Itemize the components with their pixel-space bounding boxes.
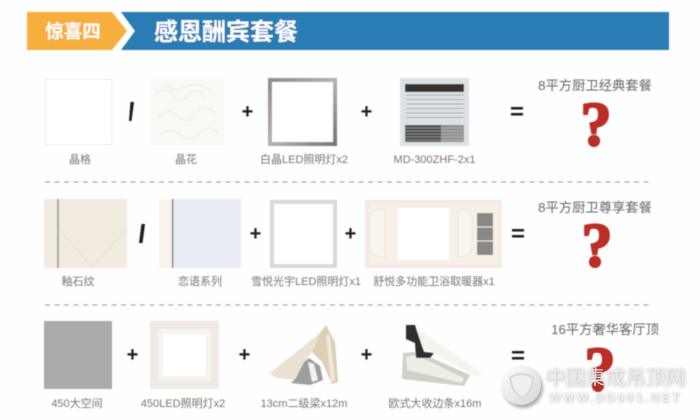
product: 晶格 white panel: 晶格 — [69, 152, 91, 166]
watermark logo — [501, 365, 543, 408]
plus operator: + — [242, 101, 253, 123]
result: living room package: 16平方奢华客厅顶 — [551, 321, 659, 337]
blue title bar — [121, 12, 669, 50]
plus operator: + — [361, 101, 372, 123]
orange tag — [27, 12, 127, 50]
product: 450 LED light — [141, 321, 225, 410]
product: 13cm beam — [261, 325, 347, 410]
slash operator — [129, 102, 134, 121]
product: 白晶 LED light: 白晶LED照明灯x2 — [260, 152, 348, 166]
watermark text: WWW.DD001.NET — [550, 391, 682, 405]
product: 白晶 LED light — [260, 78, 348, 166]
blue title bar: 感恩酬宾套餐 — [154, 18, 298, 46]
product: 450 large-space panel — [44, 321, 112, 410]
row 2: premium package — [44, 199, 652, 288]
product: 恋语系列 panel: 恋语系列 — [178, 274, 222, 288]
product: 晶花 patterned panel — [150, 79, 224, 166]
product: MD-300ZHF-2 heater — [394, 78, 475, 166]
product: 釉石纹 tile: 釉石纹 — [62, 274, 94, 288]
product: European trim strip: 欧式大收边条x16m — [389, 396, 481, 410]
product: 舒悦 bath heater: 舒悦多功能卫浴取暖器x1 — [373, 274, 495, 288]
divider — [45, 181, 653, 183]
product: 450 LED light: 450LED照明灯x2 — [141, 397, 225, 410]
product: 晶花 patterned panel: 晶花 — [175, 153, 197, 166]
result: classic package: 8平方厨卫经典套餐 — [538, 78, 652, 93]
watermark text: 中国集成吊顶网 — [546, 367, 686, 390]
orange tag: 惊喜四 — [45, 21, 101, 42]
product: MD-300ZHF-2 heater: MD-300ZHF-2x1 — [394, 154, 475, 166]
product: 雪悦光宇 LED light: 雪悦光宇LED照明灯x1 — [251, 274, 361, 288]
icon: question mark: ? — [584, 336, 616, 404]
equals operator — [512, 351, 524, 360]
result: living room package — [551, 321, 659, 404]
result: premium package: 8平方厨卫尊享套餐 — [538, 199, 652, 215]
product: 舒悦 bath heater — [365, 200, 502, 288]
product: 釉石纹 tile — [44, 199, 127, 288]
plus operator: + — [250, 223, 261, 245]
product: 恋语系列 panel — [159, 199, 241, 288]
watermark text: 中国集成吊顶网 — [545, 366, 685, 389]
row 1: classic package — [46, 78, 652, 166]
icon: question mark: ? — [580, 91, 612, 159]
product: European trim strip — [389, 325, 482, 410]
plus operator: + — [127, 344, 138, 366]
watermark text: WWW.DD001.NET — [549, 390, 681, 404]
slash operator — [139, 224, 145, 243]
watermark text — [545, 366, 686, 405]
plus operator: + — [361, 344, 372, 366]
icon: question mark: ? — [582, 212, 612, 280]
equals operator — [512, 229, 524, 238]
row 3: living room package — [44, 321, 659, 410]
header banner — [27, 12, 669, 50]
product: 晶格 white panel — [46, 80, 112, 166]
result: premium package — [538, 199, 652, 280]
product: 雪悦光宇 LED light — [251, 200, 361, 288]
divider — [45, 304, 653, 306]
equals operator — [511, 107, 523, 116]
result: classic package — [538, 78, 652, 159]
product: 13cm beam: 13cm二级梁x12m — [261, 396, 347, 410]
plus operator: + — [345, 223, 356, 245]
watermark — [501, 365, 686, 408]
plus operator: + — [239, 344, 250, 366]
product: 450 large-space panel: 450大空间 — [51, 396, 103, 410]
